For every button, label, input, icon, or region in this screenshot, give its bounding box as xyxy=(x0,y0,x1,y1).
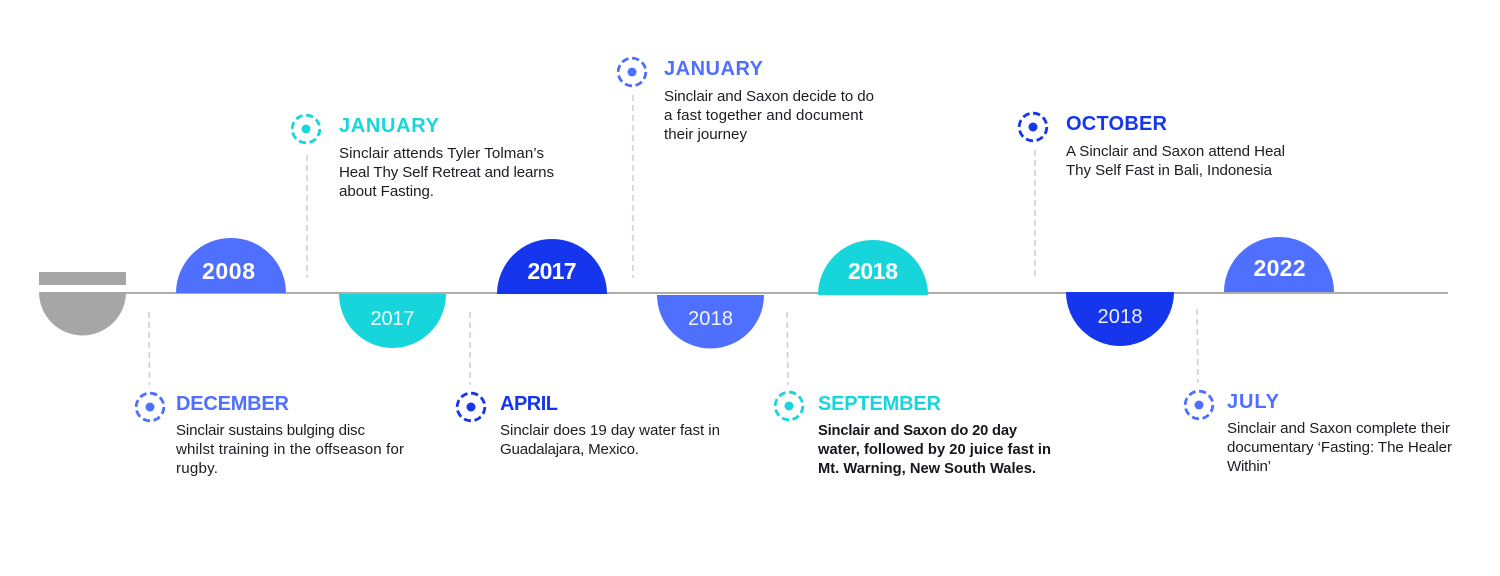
event: October 2018: OCTOBER xyxy=(1066,113,1168,135)
event: January 2017: JANUARY xyxy=(339,115,440,137)
year marker: 2018 dark: 2018 xyxy=(1098,306,1142,328)
event: April 2017: Guadalajara, Mexico. xyxy=(500,441,639,458)
event: September 2018: Sinclair and Saxon do 20 day xyxy=(818,423,1018,439)
year marker: 2018 teal xyxy=(818,240,928,295)
event: September 2018: water, followed by 20 juice fast in xyxy=(817,442,1051,458)
event: July 2022: Sinclair and Saxon complete their xyxy=(1227,420,1450,437)
event: January 2017: Sinclair attends Tyler Tolman’s xyxy=(339,145,544,162)
event: July 2022: Within’ xyxy=(1227,458,1271,475)
year marker: 2022 xyxy=(1224,237,1334,292)
year marker: 2008 xyxy=(176,238,286,293)
event: January 2017: about Fasting. xyxy=(339,183,434,200)
event: January 2018: their journey xyxy=(664,126,747,143)
event: April 2017 xyxy=(457,312,720,458)
event: December 2008: rugby. xyxy=(176,460,218,477)
event: October 2018: Thy Self Fast in Bali, Indonesia xyxy=(1066,162,1273,179)
year marker: 2017 teal xyxy=(339,294,446,348)
timeline axis xyxy=(125,292,1448,294)
icon: grey start marker xyxy=(39,272,126,335)
year marker: 2018 dark xyxy=(1066,292,1174,346)
event: September 2018: Mt. Warning, New South Wales. xyxy=(818,461,1036,477)
event: January 2017: Heal Thy Self Retreat and learns xyxy=(339,164,554,181)
year marker: 2017 teal: 2017 xyxy=(370,308,414,330)
year marker: 2017 dark: 2017 xyxy=(528,258,576,284)
year marker: 2022: 2022 xyxy=(1254,255,1306,281)
event: October 2018 xyxy=(1019,113,1285,276)
event: December 2008 xyxy=(136,312,404,477)
event: July 2022: documentary ‘Fasting: The Healer xyxy=(1227,439,1452,456)
year marker: 2008: 2008 xyxy=(202,258,255,284)
event: April 2017: APRIL xyxy=(500,393,558,415)
event: July 2022 xyxy=(1185,309,1452,475)
event: January 2018 xyxy=(618,58,874,278)
year marker: 2017 dark xyxy=(497,239,607,294)
event: December 2008: whilst training in the offseason for xyxy=(175,441,404,458)
event: December 2008: DECEMBER xyxy=(176,393,290,415)
event: April 2017: Sinclair does 19 day water fast in xyxy=(500,422,720,439)
event: September 2018 xyxy=(775,312,1051,477)
event: October 2018: A Sinclair and Saxon attend Heal xyxy=(1066,143,1285,160)
year marker: 2018 blue xyxy=(657,295,764,348)
event: December 2008: Sinclair sustains bulging disc xyxy=(176,422,365,439)
event: September 2018: SEPTEMBER xyxy=(818,393,942,415)
event: January 2017 xyxy=(292,115,554,278)
event: July 2022: JULY xyxy=(1227,391,1280,413)
event: January 2018: a fast together and document xyxy=(664,107,864,124)
year marker: 2018 teal: 2018 xyxy=(848,258,898,284)
year marker: 2018 blue: 2018 xyxy=(688,308,733,330)
event: January 2018: Sinclair and Saxon decide to do xyxy=(664,88,874,105)
event: January 2018: JANUARY xyxy=(664,58,764,80)
